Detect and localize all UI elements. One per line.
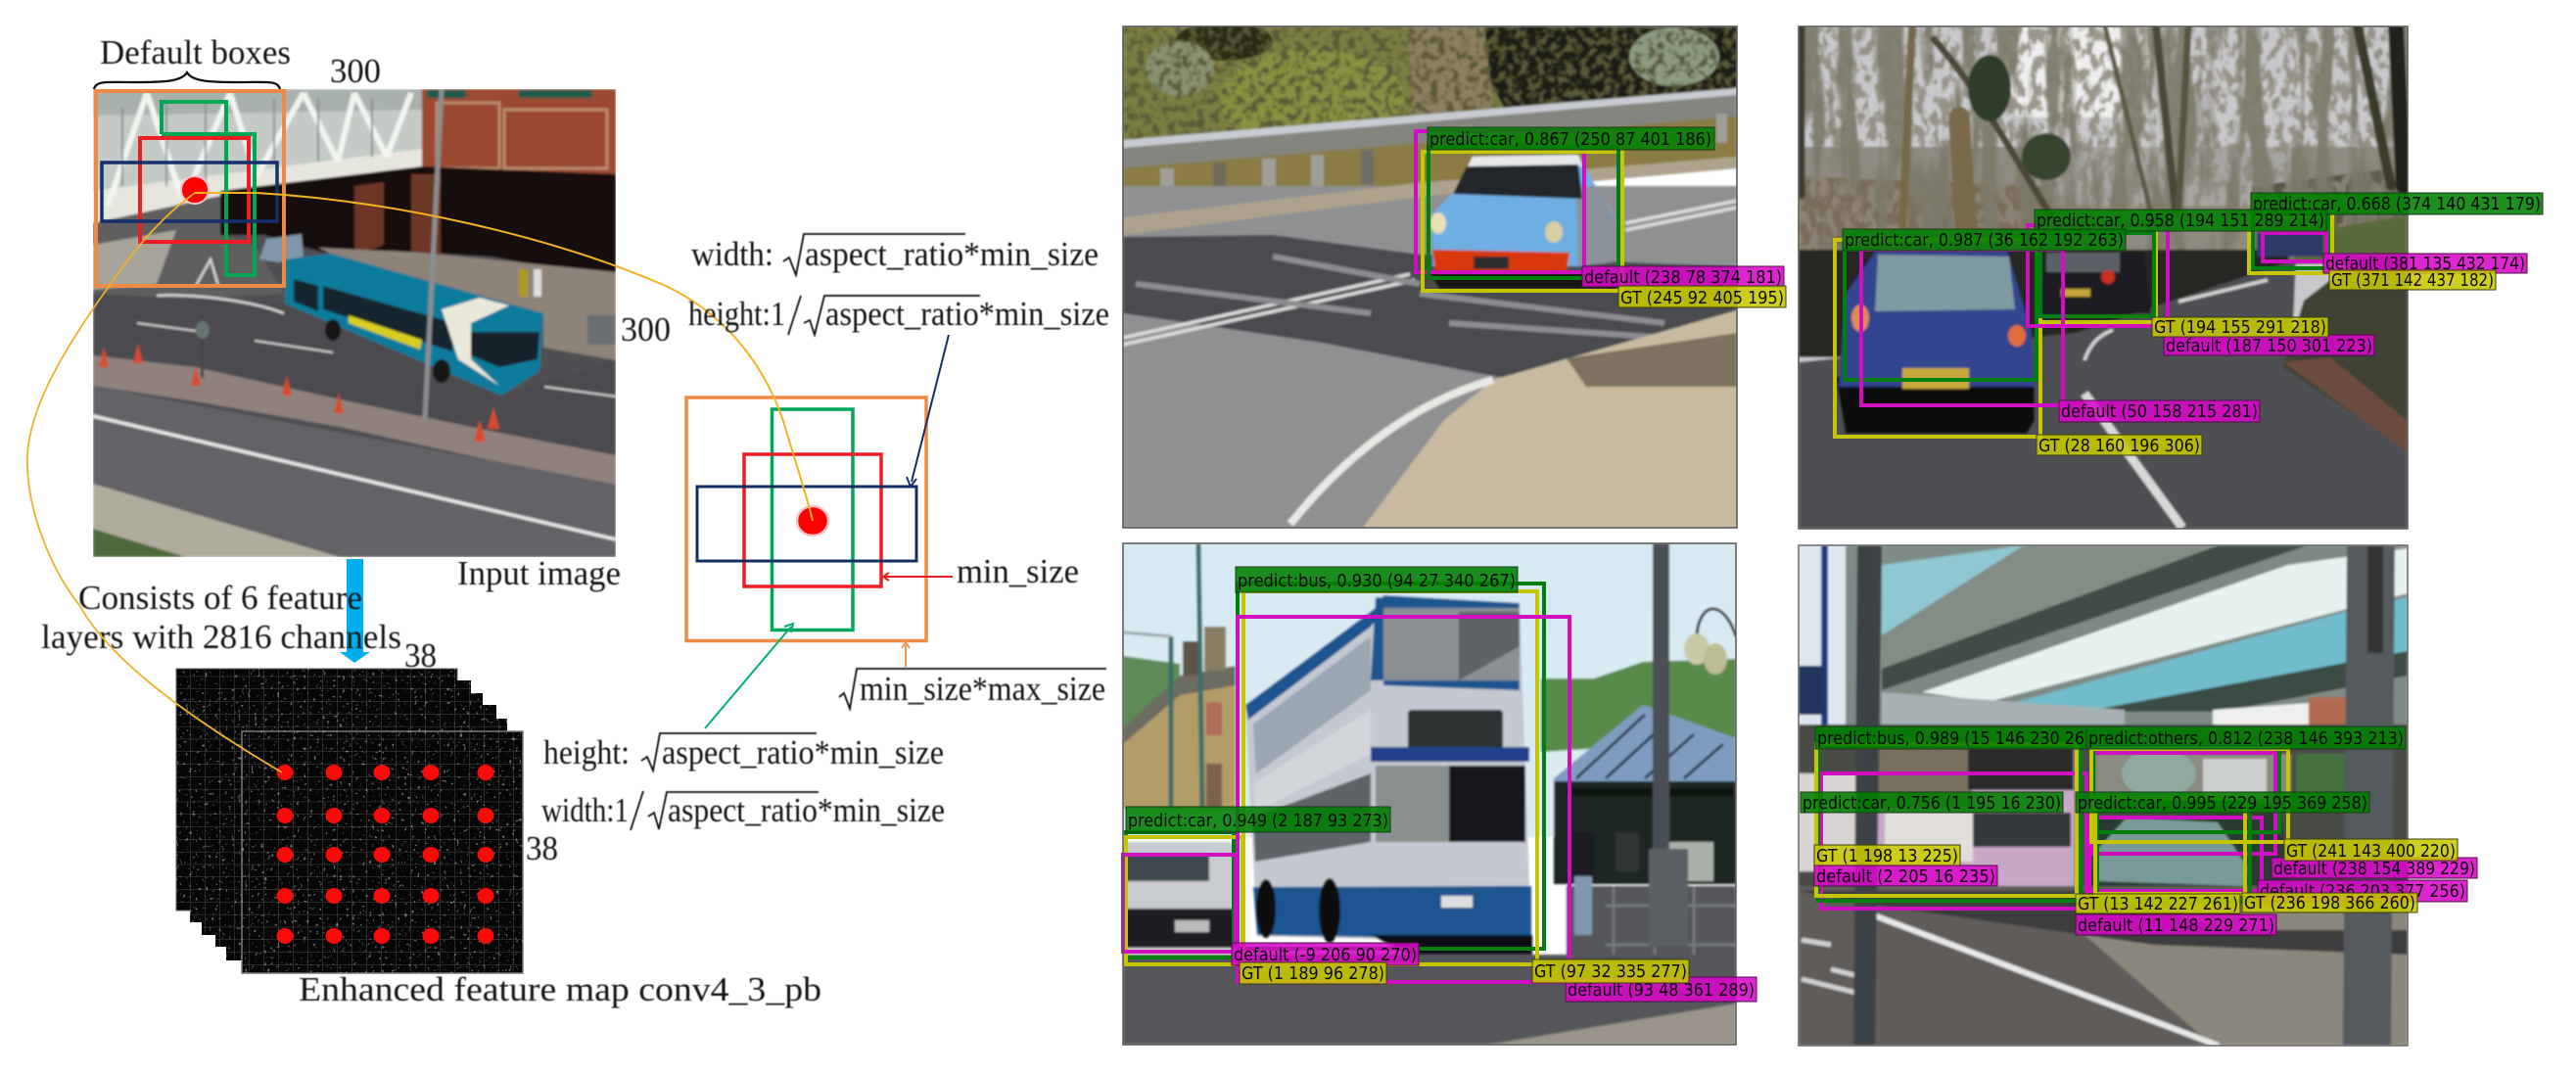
yellow ground truth box [1423, 152, 1622, 291]
photo: double-decker bus and van [1123, 543, 1736, 1045]
formula: min_size: min_size [957, 552, 1079, 590]
label: input image: Input image [457, 554, 621, 592]
label: enhanced feature map: Enhanced feature map conv4_3_pb [299, 970, 821, 1008]
label: GT small car: GT (1 198 13 225) [1816, 846, 1958, 866]
label: default bus: default (11 148 229 271) [2078, 915, 2274, 936]
yellow ground truth boxes [1126, 591, 1537, 964]
navy box [697, 487, 916, 561]
formula: width of wide box: aspect_ratio*min_size [805, 235, 1099, 273]
arrow: input image to feature map [340, 559, 370, 663]
label: predict car: predict:car, 0.995 (229 195 369 258) [2078, 793, 2367, 814]
red box [744, 454, 881, 586]
formula: width of wide box: width: [691, 235, 773, 273]
green box [772, 409, 853, 631]
label: GT first: GT (28 160 196 306) [2038, 436, 2200, 456]
panel frame [1799, 545, 2408, 1046]
yellow ground truth boxes [1816, 744, 2288, 896]
magenta default boxes [1861, 225, 2326, 405]
formula: width of tall box: width:1 [541, 791, 629, 829]
magenta default box [1416, 131, 1584, 272]
label: default car: default (236 203 377 256) [2260, 881, 2465, 902]
label: default bus: default (93 48 361 289) [1568, 980, 1755, 1001]
green default box [162, 102, 255, 275]
label: predict car: predict:car, 0.949 (2 187 93 273) [1128, 811, 1388, 831]
formula: width of tall box: aspect_ratio*min_size [668, 791, 945, 829]
red default box [140, 138, 249, 242]
label: ground truth: GT (245 92 405 195) [1620, 288, 1784, 308]
formula: height of wide box: height:1 [688, 295, 785, 333]
label: image width 300: 300 [330, 52, 381, 90]
formula: width of wide box [691, 234, 1099, 275]
label: GT van: GT (1 189 96 278) [1241, 963, 1384, 984]
formula: height of tall box: aspect_ratio*min_size [662, 733, 944, 771]
label: GT bus: GT (97 32 335 277) [1534, 961, 1687, 982]
arrow: green formula pointer [705, 624, 793, 728]
label: predict car first: predict:car, 0.987 (36 162 192 263) [1845, 230, 2124, 251]
magenta default boxes [1123, 617, 1569, 982]
label: predict others: predict:others, 0.812 (238 146 393 213) [2088, 728, 2404, 749]
panel frame [1123, 26, 1737, 528]
label: predict car third: predict:car, 0.668 (374 140 431 179) [2253, 194, 2541, 214]
curve: input image anchor to diagram [195, 193, 813, 521]
label: predict small car: predict:car, 0.756 (1 195 16 230) [1803, 793, 2061, 814]
label: predict car: predict:car, 0.867 (250 87 401 186) [1429, 129, 1711, 150]
panel frame [1123, 543, 1736, 1045]
label: GT bus: GT (13 142 227 261) [2078, 894, 2238, 914]
orange default box [96, 91, 284, 286]
arrow: red min_size pointer [883, 573, 953, 581]
red centre dot [797, 506, 828, 536]
brace over default boxes [94, 72, 280, 89]
text: feature layers description [41, 579, 401, 656]
photo: rally car on curved road [1123, 22, 1737, 528]
label: default van: default (-9 206 90 270) [1234, 945, 1417, 965]
magenta default boxes [1821, 753, 2275, 909]
label: default small car: default (2 205 16 235) [1816, 866, 1995, 887]
arrow: navy formula pointer [907, 335, 949, 487]
formula: width of tall box [541, 791, 945, 830]
panel: detection result, rally car [1123, 22, 1786, 528]
green prediction box [1429, 147, 1618, 278]
label: feature map height 38: 38 [526, 829, 558, 867]
panel: detection result, three cars in woods [1799, 26, 2543, 529]
orange box [686, 397, 926, 640]
label: default box: default (238 78 374 181) [1584, 267, 1782, 288]
text: feature layers description: layers with 2816 channels [41, 618, 401, 656]
label: GT third: GT (371 142 437 182) [2331, 270, 2494, 291]
label: default third: default (381 135 432 174) [2325, 254, 2525, 274]
feature map stack: conv4_3_pb [176, 669, 523, 973]
label: default others: default (238 154 389 229) [2273, 859, 2475, 879]
diagram: default box geometry [686, 397, 926, 640]
panel frame [1799, 26, 2408, 529]
label: default second: default (187 150 301 223) [2166, 336, 2372, 356]
label: image height 300: 300 [621, 310, 671, 349]
arrow: orange formula pointer [902, 642, 910, 667]
curve: input image anchor to feature map [27, 193, 282, 772]
label: GT others: GT (241 143 400 220) [2286, 841, 2456, 862]
green prediction boxes [1126, 584, 1544, 958]
green prediction boxes [1818, 744, 2279, 901]
label: feature map width 38: 38 [404, 636, 437, 675]
panel: detection result, double-decker bus [1123, 543, 1756, 1045]
navy default box [102, 163, 277, 221]
heading: default boxes: Default boxes [100, 33, 291, 71]
label: predict bus: predict:bus, 0.930 (94 27 340 267) [1238, 571, 1516, 591]
text: feature layers description: Consists of 6 feature [78, 579, 362, 617]
panel: input image with default boxes [93, 89, 616, 557]
red anchor dot [181, 176, 209, 204]
photo: buses and cars under overpass [1799, 545, 2408, 1046]
photo: street with teal bus [93, 89, 616, 557]
label: predict car second: predict:car, 0.958 (194 151 289 214) [2037, 210, 2324, 231]
label: default first: default (50 158 215 281) [2061, 401, 2258, 422]
formula: orange box size: min_size*max_size [860, 670, 1105, 708]
label: GT car: GT (236 198 366 260) [2244, 893, 2415, 913]
formula: height of wide box: aspect_ratio*min_size [825, 295, 1109, 333]
formula: height of tall box: height: [543, 733, 630, 771]
label: predict bus: predict:bus, 0.989 (15 146 230 26 [1817, 728, 2084, 749]
green prediction boxes [1845, 214, 2328, 380]
label: GT second: GT (194 155 291 218) [2154, 317, 2326, 338]
formula: height of tall box [543, 733, 944, 771]
photo: cars on wooded road [1799, 26, 2408, 529]
yellow ground truth boxes [1835, 216, 2332, 437]
panel: detection result, street under overpass [1799, 545, 2477, 1046]
stacked feature layers [176, 669, 523, 973]
red anchor dots grid [276, 765, 493, 944]
formula: height of wide box [688, 295, 1109, 335]
